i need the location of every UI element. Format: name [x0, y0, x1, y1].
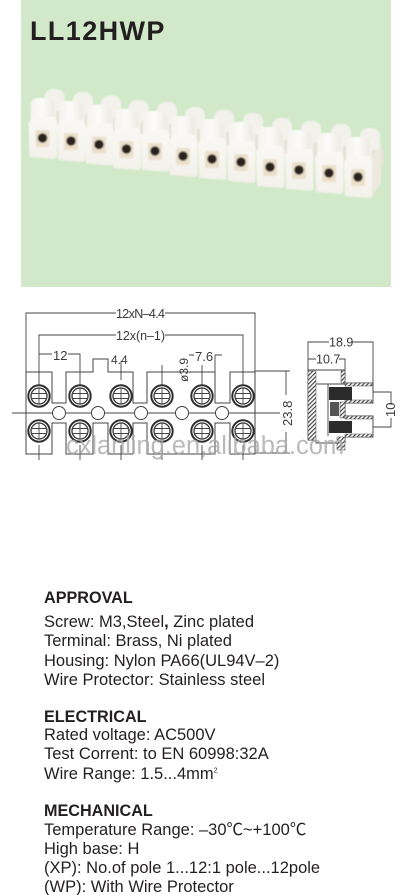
text: mechanical specifications [44, 821, 320, 895]
side view labels [316, 336, 398, 417]
text: electrical specifications: Wire Range: 1.5...4mm2 [44, 765, 218, 783]
side view labels: 10.7 [316, 352, 340, 366]
dimension labels: 12 [53, 348, 67, 363]
heading: electrical: ELECTRICAL [44, 708, 147, 726]
dimension labels: 23.8 [280, 401, 295, 426]
dimension labels [53, 307, 295, 426]
dimension labels: 12x(n–1) [116, 329, 165, 343]
product photo: terminal block [28, 88, 384, 198]
side view labels: 10 [383, 403, 398, 417]
heading: approval: APPROVAL [44, 588, 133, 606]
text: approval specifications: Housing: Nylon PA66(UL94V–2) [44, 652, 279, 670]
dimension labels: ø3.9 [177, 358, 191, 382]
technical drawing: front view [12, 307, 295, 460]
text: electrical specifications [44, 726, 269, 783]
dimension labels: 12xN–4.4 [116, 307, 165, 321]
text: electrical specifications: Test Corrent: to EN 60998:32A [44, 745, 269, 763]
dimension lines [12, 313, 290, 460]
text: mechanical specifications: High base: H [44, 840, 139, 858]
technical drawing: side view [308, 336, 398, 450]
housing outline [26, 359, 255, 454]
title: LL12HWP [30, 16, 166, 46]
text: electrical specifications: Rated voltage: AC500V [44, 726, 216, 744]
text: approval specifications: Screw: M3,Steel, Zinc plated [44, 613, 254, 631]
side view labels: 18.9 [329, 336, 353, 350]
text: mechanical specifications: (XP): No.of pole 1...12:1 pole...12pole [44, 859, 320, 877]
dimension labels: 4.4 [111, 353, 128, 367]
dimension labels: 7.6 [195, 349, 213, 364]
text: approval specifications [44, 613, 279, 689]
text: mechanical specifications: Temperature Range: –30℃~+100℃ [44, 821, 306, 839]
text: approval specifications: Wire Protector: Stainless steel [44, 671, 265, 689]
watermark: cxlanling.en,alibaba.com [66, 432, 344, 460]
panel: product photo background [20, 0, 390, 287]
text: approval specifications: Terminal: Brass, Ni plated [44, 632, 232, 650]
heading: mechanical: MECHANICAL [44, 802, 153, 820]
